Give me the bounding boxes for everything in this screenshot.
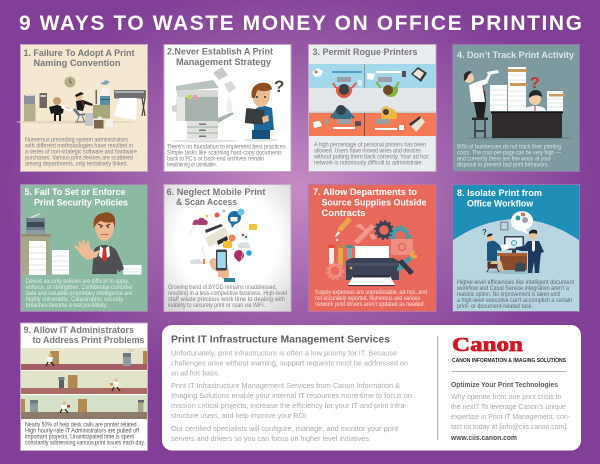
panel 4 text: and currently there are few ways at your	[457, 156, 551, 162]
panel 9: it administrators print problems	[20, 323, 148, 450]
panel 2 text	[167, 144, 287, 168]
panel 6 text: staff waste precious work time to dealing with	[168, 297, 285, 303]
panel 6 text: Growing trend of BYOD remains unaddressed,	[168, 285, 277, 291]
panel 1 text: Numerous preceding system administrators	[25, 138, 128, 144]
panel 9 text: High hourly-rate IT Administrators are pulled off	[25, 428, 139, 434]
panel 2 heading: 2.Never Establish A Print	[167, 46, 273, 56]
panel 3 heading: 3. Permit Rogue Printers	[312, 47, 418, 57]
panel 1 heading	[24, 48, 134, 68]
panel 8 heading	[457, 188, 542, 208]
panel 7 text: network print drivers aren’t updated as needed.	[315, 302, 425, 308]
illustration: cluttered office	[16, 76, 146, 128]
optimize text: tact us today at [info@ciis.canon.com].	[451, 422, 568, 431]
panel 9 text	[25, 422, 145, 446]
canon logo: Canon	[452, 334, 523, 356]
panel 3 text: network is notoriously difficult to administrate.	[314, 160, 423, 166]
panel 3 text: without putting them back correctly. Your ad hoc	[313, 154, 429, 160]
optimize text: the next? To leverage Canon’s unique	[451, 402, 566, 411]
panel 2 text: back to PC’s or back-end archives remain	[167, 156, 264, 162]
panel 1 text: a series of non-strategic software and hardware	[25, 150, 138, 156]
services paragraph 2: mission critical projects, increase the efficiency for your IT and print infra-	[171, 401, 408, 410]
panel: services summary	[162, 325, 581, 450]
optimize text: expertise in Print IT Management, con-	[451, 412, 571, 421]
panel 2 text: Simple tasks like scanning hard-copy documents	[167, 150, 282, 156]
illustration: paper stacks and desk: ?	[530, 75, 540, 92]
panel 7 text: not accurately reported. Numerous and various	[315, 296, 420, 302]
services paragraph 2: Print IT Infrastructure Management Services from Canon Information &	[171, 381, 400, 390]
panel 6 text: resulting in a less-competitive business. High-level	[168, 291, 287, 297]
panel 7 heading: 7. Allow Departments to	[313, 187, 418, 197]
panel 5 text	[26, 279, 133, 309]
panel 9 heading	[24, 325, 144, 345]
panel 2 text: There’s no foundation to implement best practices.	[167, 144, 287, 150]
services paragraph 2: structure users, and help improve your ROI.	[171, 411, 308, 420]
panel 3 text	[313, 142, 429, 166]
panel 8 text: print- or document-related task.	[457, 304, 533, 310]
panel 1 text	[24, 138, 138, 168]
canon logo	[452, 334, 566, 364]
website: www.ciis.canon.com	[450, 433, 517, 442]
panel 4: do not track print activity	[452, 44, 580, 172]
panel 5 heading: 5. Fail To Set or Enforce	[24, 187, 126, 197]
panel 5 text: Device security policies are difficult to apply,	[26, 279, 129, 285]
panel 4 text: disposal to prevent bad print behaviors.	[457, 162, 549, 168]
services paragraph 3: servers and drivers so you can focus on higher level initiatives.	[171, 434, 371, 443]
panel 3 text: allowed. Users have moved wires and devices	[314, 148, 421, 154]
panel 1: failure to adopt naming convention	[16, 44, 148, 172]
panel 5 text: data and valuable proprietary intelligence are	[26, 291, 133, 297]
panel 7 heading	[313, 187, 426, 218]
panel 6 text: inability to securely print or scan via WiFi.	[168, 303, 265, 309]
services paragraph 1: challenges arise without warning, support requests must be addressed on	[171, 358, 408, 368]
panel 9 text: constantly addressing various print issues each day.	[25, 440, 145, 446]
panel 5 text: breaches become a real possibility.	[26, 303, 107, 309]
optimize text	[451, 392, 571, 431]
panel 5 heading: Print Security Policies	[34, 198, 128, 208]
services paragraph 3: Our certified specialists will configure, manage, and monitor your print	[171, 424, 398, 433]
panel 5: print security policies	[20, 184, 148, 312]
panel 8 light arc background	[453, 219, 579, 311]
panel 7: departments source supplies	[308, 184, 436, 312]
services heading: Print IT Infrastructure Management Services	[171, 334, 390, 346]
illustration: copier and confused man: ?	[274, 77, 284, 96]
panel 1 heading: Naming Convention	[34, 58, 120, 68]
panel 8 text: Higher-level efficiencies like intelligent document	[457, 280, 574, 286]
panel 9 heading: 9. Allow IT Administrators	[24, 325, 134, 335]
optimize text: Why operate from one print crisis to	[451, 392, 562, 401]
panel 3: permit rogue printers	[308, 44, 436, 172]
services paragraph 2: Imaging Solutions enable your internal IT resources more time to focus on	[171, 391, 412, 400]
panel 6: neglect mobile print	[164, 184, 291, 312]
panel 2 heading: Management Strategy	[176, 57, 271, 67]
optimize heading: Optimize Your Print Technologies	[451, 380, 558, 389]
panel 1 text: with different methodologies have resulted in	[24, 144, 133, 150]
panel 7 text: Supply expenses are unpredictable, ad-hoc, and	[315, 290, 427, 296]
services paragraph 3	[171, 424, 398, 443]
panel 1 heading: 1. Failure To Adopt A Print	[24, 48, 134, 58]
title: 9 WAYS TO WASTE MONEY ON OFFICE PRINTING	[19, 12, 582, 35]
panel 9 text: Nearly 50% of help desk calls are printer related.	[25, 422, 138, 428]
panel 6 heading: & Scan Access	[176, 197, 237, 207]
panel 5 text: highly vulnerable. Catastrophic security	[26, 297, 123, 303]
illustration: printer, tools and ink	[326, 217, 417, 286]
panel 5 heading	[24, 187, 128, 208]
panel 7 heading: Source Supplies Outside	[322, 198, 426, 208]
illustration: messy desks from above	[309, 64, 436, 136]
panel 4 text: costs. The cost-per-page can be very high —	[457, 150, 561, 156]
illustration: angry man with raised hand	[21, 212, 142, 275]
services paragraph 1	[171, 348, 408, 378]
panel 5 text: enforce, or strengthen. Confidential customer	[26, 285, 133, 291]
services paragraph 1: an ad hoc basis.	[171, 368, 220, 378]
illustration: corridors with running staff	[21, 348, 148, 419]
illustration: mobile icons cloud	[190, 208, 257, 282]
panel 8 text: realistic option. No improvement is taken until	[457, 292, 560, 298]
panel 2 text: bewildering or unreliable.	[167, 162, 217, 168]
panel 8 heading: 8. Isolate Print from	[457, 188, 542, 198]
panel 2: never establish a strategy	[164, 44, 291, 172]
panel 9 text: important projects. Unanticipated time is spent	[25, 434, 134, 440]
panel 7 heading: Contracts	[322, 208, 366, 218]
illustration: two businessmen at a desk: ?	[482, 228, 487, 237]
panel 4 text: 90% of businesses do not track their printing	[457, 144, 561, 150]
panel 8 text: workflow and Cloud Service integration aren’t a	[456, 286, 570, 292]
panel 4 text	[457, 144, 561, 168]
panel 6 heading: 6. Neglect Mobile Print	[166, 187, 266, 197]
panel 8 heading: Office Workflow	[467, 198, 534, 208]
panel 8 text	[456, 280, 574, 310]
services paragraph 1: Unfortunately, print infrastructure is often a low priority for IT. Because	[171, 348, 397, 358]
panel 9 heading: to Address Print Problems	[32, 335, 144, 345]
panel 1 text: among departments, only tentatively linked.	[25, 162, 128, 168]
services paragraph 2	[171, 381, 412, 420]
panel 6 heading	[166, 187, 266, 207]
panel 3 text: A high percentage of personal printers has been	[314, 142, 426, 148]
panel 1 text: purchases. Various print devices are scattered	[25, 156, 133, 162]
panel 4 heading: 4. Don’t Track Print Activity	[457, 50, 574, 60]
panel 2 heading	[167, 46, 273, 67]
panel 6 text	[168, 285, 287, 309]
panel 8 text: a high-level executive can’t accomplish a certain	[457, 298, 572, 304]
panel 8: isolate print from workflow	[452, 184, 580, 312]
canon logo: CANON INFORMATION & IMAGING SOLUTIONS	[452, 358, 566, 364]
panel 7 text	[315, 290, 427, 308]
